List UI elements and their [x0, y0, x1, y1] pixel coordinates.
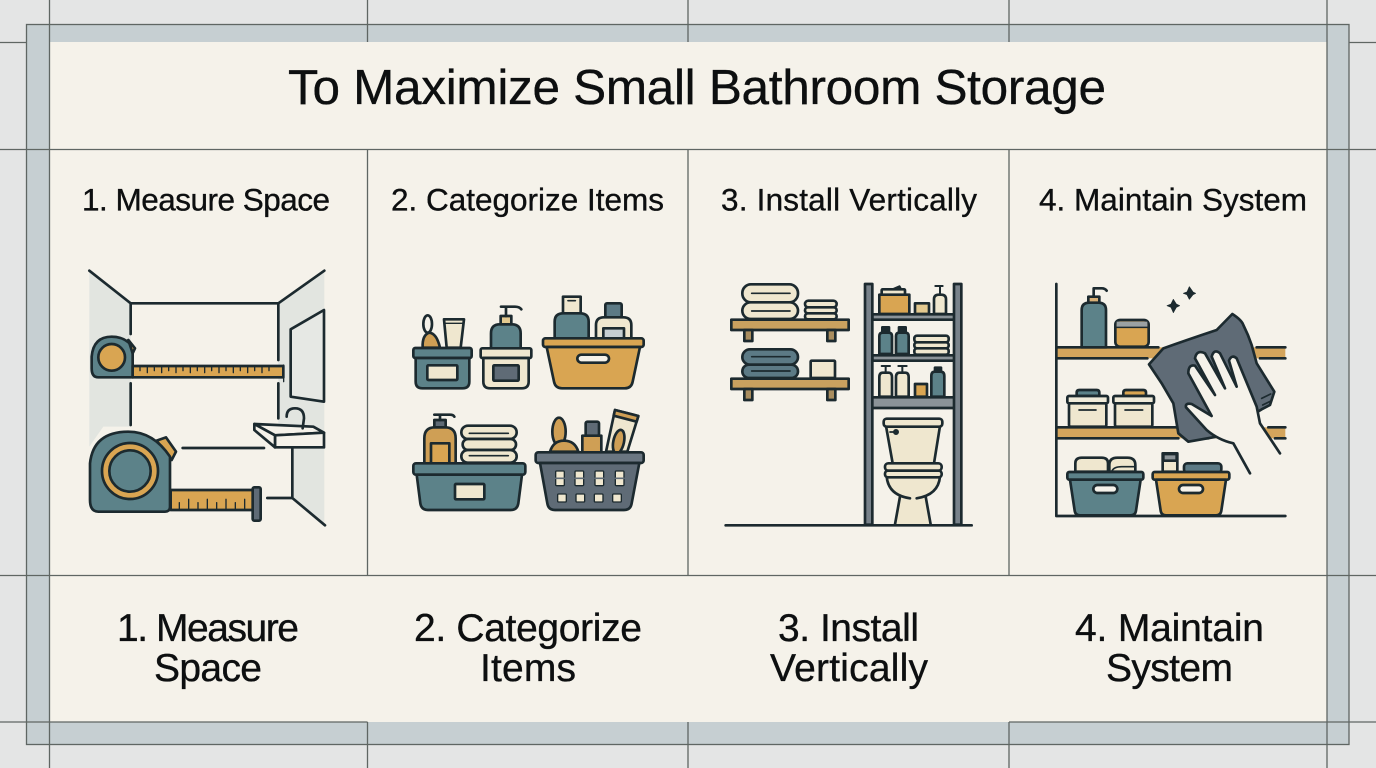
label: step 4: System: [1106, 647, 1233, 690]
label: step 4: [1075, 607, 1264, 690]
title: To Maximize Small Bathroom Storage: [288, 60, 1106, 115]
label: step 2: 2. Categorize: [414, 607, 642, 650]
label: step 1: [117, 607, 299, 690]
label: step 1: 1. Measure: [117, 607, 299, 650]
panel: step 3 install vertically: [721, 182, 977, 690]
icon: hand wiping shelves with cloth: [1056, 284, 1285, 516]
icon: wall shelves and over-toilet rack: [726, 284, 972, 525]
label: step 2: Items: [480, 647, 576, 690]
panel: step 1 measure space: [82, 182, 330, 690]
panel: step 2 categorize items: [391, 182, 664, 690]
icon: tape measures in bathroom: [89, 271, 325, 526]
label: step 2: [414, 607, 642, 690]
heading: step 1: 1. Measure Space: [82, 182, 330, 218]
heading: step 4: 4. Maintain System: [1039, 182, 1307, 218]
heading: step 3: 3. Install Vertically: [721, 182, 977, 218]
label: step 3: 3. Install: [778, 607, 919, 650]
label: step 3: [770, 607, 928, 690]
label: step 3: Vertically: [770, 647, 928, 690]
icon: sorted storage bins: [413, 297, 644, 510]
label: step 1: Space: [154, 647, 262, 690]
panel: step 4 maintain system: [1039, 182, 1307, 690]
heading: step 2: 2. Categorize Items: [391, 182, 664, 218]
label: step 4: 4. Maintain: [1075, 607, 1264, 650]
